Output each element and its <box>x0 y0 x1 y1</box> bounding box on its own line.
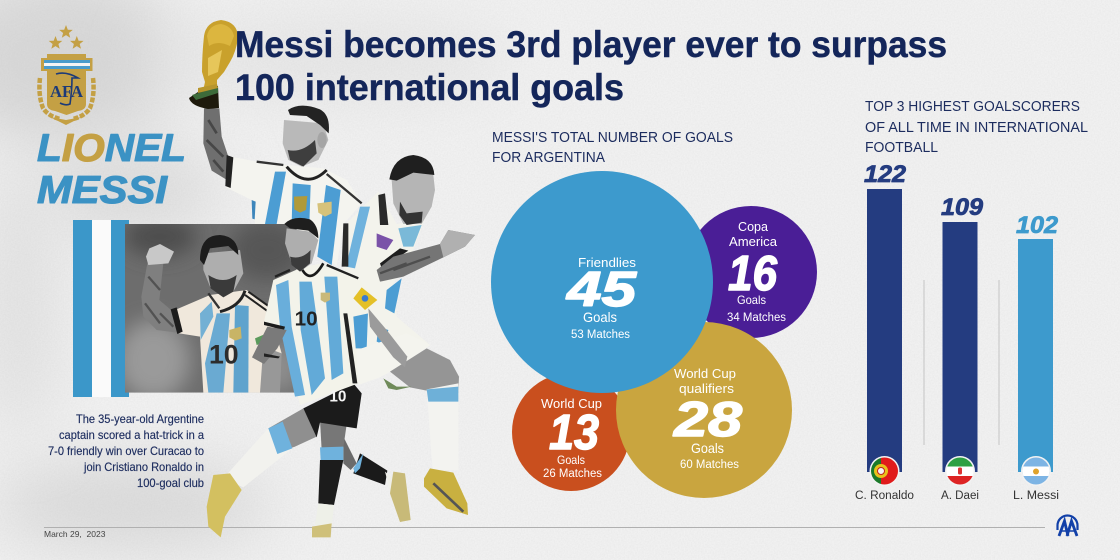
bubble: World Cup qualifiers: qualifiers <box>679 381 735 396</box>
bubble: Friendlies: 53 Matches <box>571 329 630 341</box>
bubble: World Cup: 13 <box>549 406 599 460</box>
bar: Daei: A. Daei <box>941 490 979 502</box>
icon: AFA crest <box>39 25 94 125</box>
heading: top 3 scorers: TOP 3 HIGHEST GOALSCORERS <box>865 99 1080 115</box>
bar: Daei: 109 <box>941 194 984 221</box>
bar: Ronaldo <box>855 161 914 502</box>
heading: top 3 scorers <box>865 99 1088 156</box>
title: Messi becomes 3rd player ever to surpass <box>235 24 947 65</box>
title <box>235 24 947 108</box>
bubble: World Cup: Goals <box>557 453 585 467</box>
bubble: Copa America: Copa <box>738 219 769 234</box>
caption text: 7-0 friendly win over Curacao to <box>48 444 204 458</box>
caption text: join Cristiano Ronaldo in <box>83 460 204 474</box>
bubble: Copa America: 16 <box>728 247 778 301</box>
bar: Messi: 102 <box>1016 212 1059 239</box>
bubble: World Cup: World Cup <box>541 396 602 411</box>
heading: top 3 scorers: FOOTBALL <box>865 140 938 156</box>
caption text <box>48 412 204 490</box>
bubble: World Cup <box>512 373 630 491</box>
heading: top 3 scorers: OF ALL TIME IN INTERNATIONAL <box>865 120 1088 136</box>
figure: Messi in number 10 <box>207 218 411 537</box>
figure: Messi in number 10: 10 <box>329 389 346 406</box>
photo panel: Messi celebrating <box>125 224 297 393</box>
bubble: Copa America: 34 Matches <box>727 312 786 324</box>
bar: Daei <box>941 194 984 502</box>
photo collage of Messi <box>117 106 475 537</box>
bar: Messi <box>1013 212 1059 502</box>
bubble: Copa America: America <box>729 234 778 249</box>
caption text: 100-goal club <box>137 476 204 490</box>
title: 100 international goals <box>235 67 624 108</box>
caption text: The 35-year-old Argentine <box>76 412 204 426</box>
name: Lionel Messi: MESSI <box>37 169 168 212</box>
bubble: World Cup: 26 Matches <box>543 468 602 480</box>
trophy <box>189 20 238 109</box>
name: Lionel Messi: LIONEL <box>37 127 186 170</box>
photo panel: Messi celebrating: 10 <box>209 339 239 369</box>
footer rule <box>44 526 1045 528</box>
bubble: Copa America: Goals <box>737 293 766 307</box>
heading: total goals: FOR ARGENTINA <box>492 150 605 166</box>
bubble: Friendlies <box>491 171 713 393</box>
heading: total goals <box>492 130 733 166</box>
icon: AA logo <box>1058 516 1078 536</box>
bubble: World Cup qualifiers: Goals <box>691 440 724 456</box>
bubble: Friendlies: Friendlies <box>578 255 637 270</box>
bubble: World Cup qualifiers: 60 Matches <box>680 459 739 471</box>
bar chart: top goalscorers <box>855 161 1059 502</box>
figure: Messi in number 10: 10 <box>295 307 318 330</box>
bubble: World Cup qualifiers <box>616 322 792 498</box>
bubble: Copa America <box>685 206 817 338</box>
bubble: World Cup qualifiers: 28 <box>673 393 743 447</box>
heading: total goals: MESSI'S TOTAL NUMBER OF GOALS <box>492 130 733 146</box>
date: March 29, 2023 <box>44 529 106 539</box>
bar: Ronaldo: 122 <box>864 161 907 188</box>
bar: Ronaldo: C. Ronaldo <box>855 490 914 502</box>
figure: Messi leaping <box>342 155 475 515</box>
bubble: Friendlies: 45 <box>566 263 637 317</box>
argentine flag stripes <box>73 220 129 397</box>
figure: Messi raising arm <box>203 106 362 267</box>
name: Lionel Messi <box>37 127 186 212</box>
bubble: World Cup qualifiers: World Cup <box>674 366 736 381</box>
bubble: Friendlies: Goals <box>583 309 617 325</box>
bar: Messi: L. Messi <box>1013 490 1059 502</box>
icon: AFA crest: AFA <box>50 82 84 101</box>
caption text: captain scored a hat-trick in a <box>59 428 204 442</box>
